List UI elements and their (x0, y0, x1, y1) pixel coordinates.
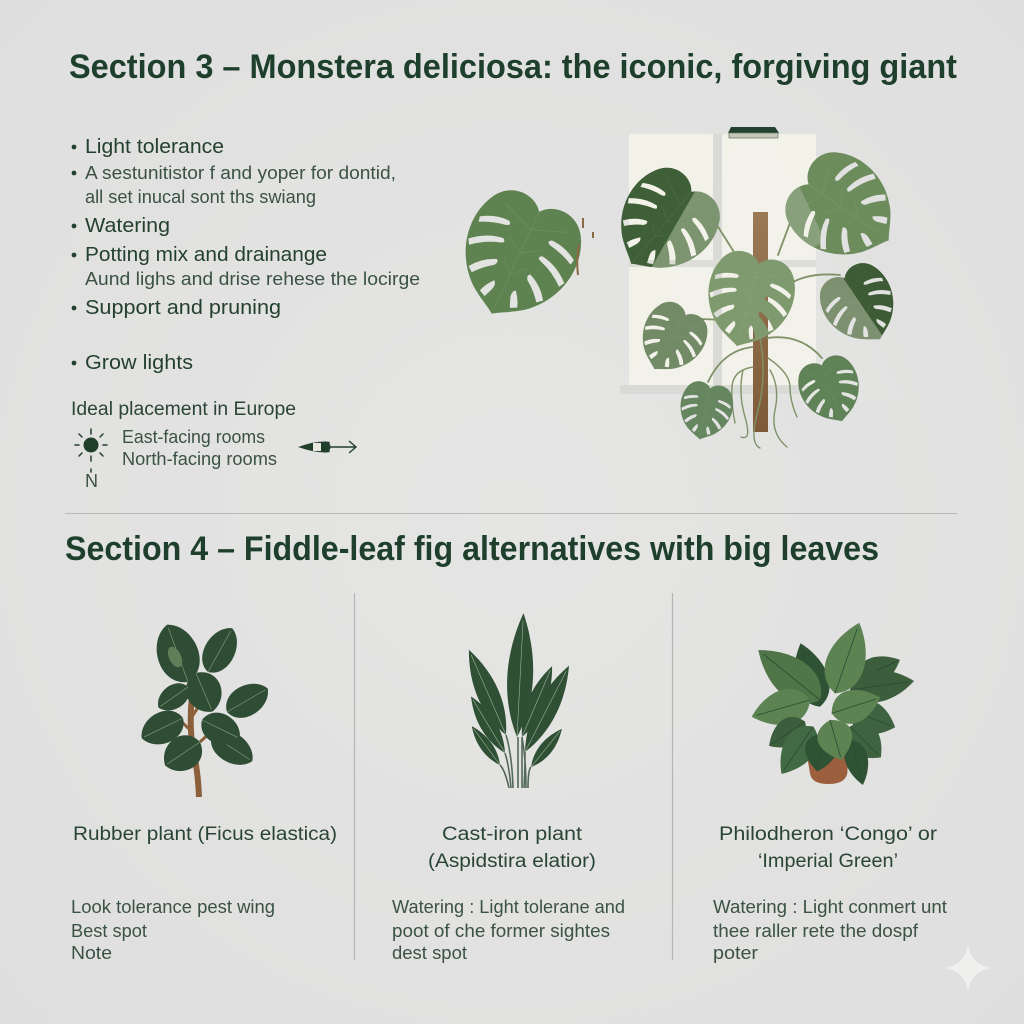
label (719, 824, 938, 872)
column dividers (354, 593, 672, 960)
care list: Grow lights (85, 352, 193, 374)
icon: sun (75, 429, 107, 472)
title: section 4: Section 4 – Fiddle-leaf fig alternatives with big leaves (65, 530, 879, 568)
label (428, 824, 596, 872)
details (713, 897, 947, 963)
care list: Watering (85, 215, 170, 237)
care list: Aund lighs and drise rehese the locirge (85, 269, 420, 289)
ideal placement legend: East-facing rooms (122, 427, 265, 447)
details: poot of che former sightes (392, 921, 610, 941)
ideal placement legend: N (85, 471, 98, 491)
details: dest spot (392, 943, 467, 963)
care list: Light tolerance (85, 136, 224, 158)
care list: all set inucal sont ths swiang (85, 187, 316, 207)
divider (65, 513, 957, 514)
care list: A sestunitistor f and yoper for dontid, (85, 163, 396, 183)
label: Rubber plant (Ficus elastica) (73, 824, 337, 845)
ideal placement legend: Ideal placement in Europe (71, 399, 296, 420)
panel: rubber plant (71, 618, 337, 963)
leaf: center (695, 245, 802, 357)
details (392, 897, 625, 963)
ideal placement legend: North-facing rooms (122, 449, 277, 469)
moss pole (753, 212, 768, 432)
label: Cast-iron plant (442, 824, 583, 845)
grow light (728, 127, 779, 138)
icon: cast-iron plant (459, 612, 578, 788)
label: (Aspidstira elatior) (428, 851, 596, 872)
leaf fragments (577, 218, 593, 275)
care list (72, 136, 420, 374)
details: Look tolerance pest wing (71, 897, 275, 917)
label: ‘Imperial Green’ (758, 851, 898, 872)
icon: rubber plant (135, 618, 275, 797)
details: Best spot (71, 921, 147, 941)
illustration: monstera on moss pole by window (440, 127, 917, 448)
leaf: left small (627, 294, 716, 385)
leaf: bottom right (792, 350, 870, 431)
icon: sparkle (944, 945, 992, 992)
leaf: top left two-tone (621, 168, 720, 268)
care list: Potting mix and drainange (85, 244, 327, 266)
ideal placement legend (71, 399, 356, 491)
panel: philodendron (713, 616, 947, 963)
icon: potted philodendron (746, 616, 916, 788)
icon: direction arrow (298, 441, 356, 453)
leaf: top right (785, 152, 890, 254)
details: Watering : Light conmert unt (713, 897, 947, 917)
details: thee raller rete the dospf (713, 921, 919, 941)
details: poter (713, 943, 758, 963)
title: section 3: Section 3 – Monstera deliciosa: the iconic, forgiving giant (69, 48, 957, 86)
leaf: right two-tone (820, 263, 894, 340)
care list: Support and pruning (85, 297, 281, 319)
details: Note (71, 943, 112, 963)
leaf: bottom left (674, 378, 737, 445)
stems and aerial roots (702, 222, 840, 448)
panel: cast-iron plant (392, 612, 625, 963)
label: Philodheron ‘Congo’ or (719, 824, 938, 845)
window (620, 134, 816, 394)
leaf: detached large (440, 178, 595, 338)
details (71, 897, 275, 963)
details: Watering : Light tolerane and (392, 897, 625, 917)
